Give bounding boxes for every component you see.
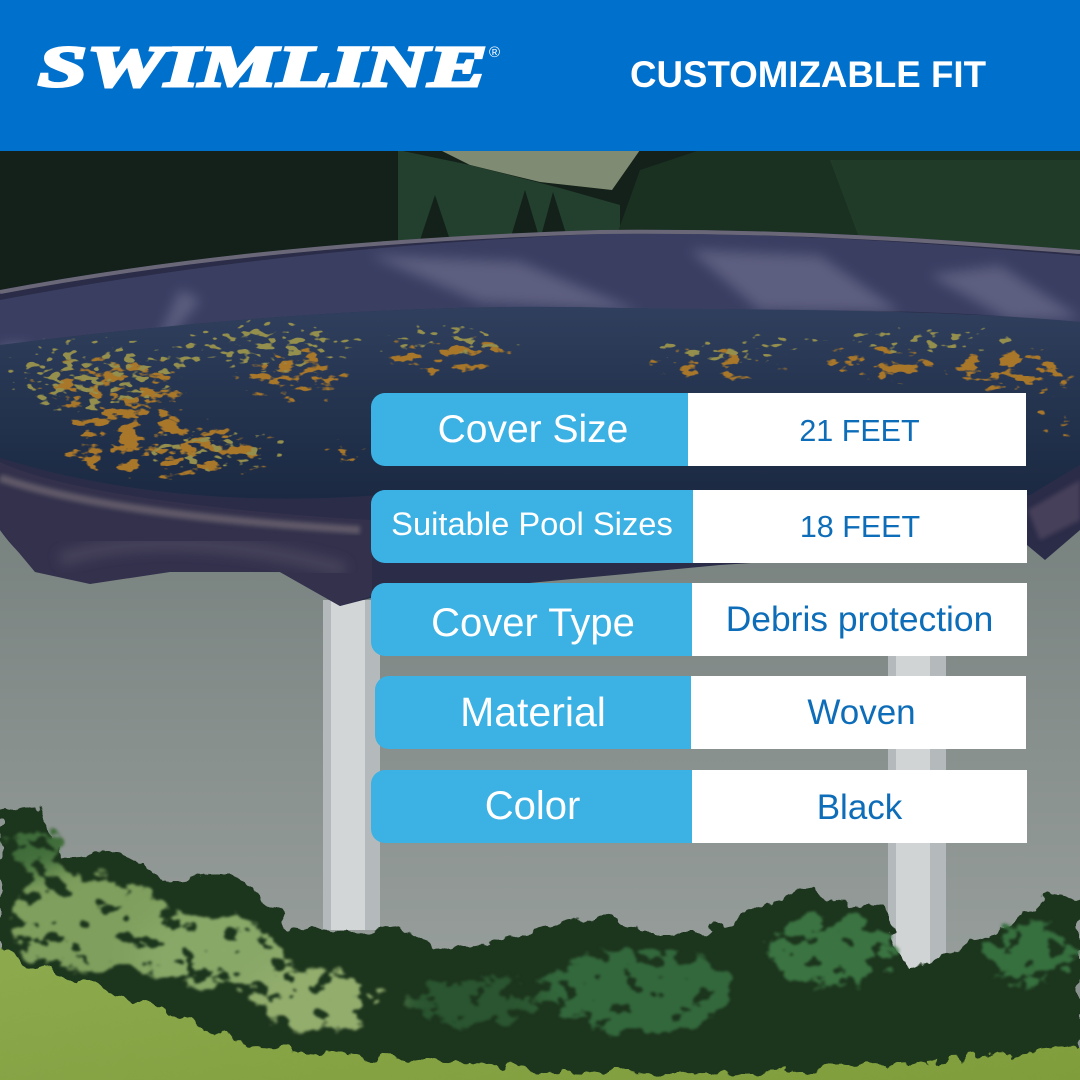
heading: CUSTOMIZABLE FIT [630, 54, 986, 95]
value [693, 490, 1027, 563]
spec row: cover size [371, 393, 1026, 466]
spec row: cover type [371, 583, 1027, 656]
value: Debris protection [726, 599, 993, 639]
spec row: material [375, 676, 1026, 749]
cover outer rim [0, 230, 1080, 606]
lawn [0, 945, 1080, 1080]
forest backdrop [0, 150, 1080, 320]
label: Cover Type [431, 600, 635, 644]
wall posts [323, 600, 946, 975]
cover water surface [0, 307, 1080, 499]
brand logo [37, 34, 500, 98]
value [688, 393, 1026, 466]
label: Color [485, 784, 580, 828]
foliage [0, 805, 1080, 1080]
label: Material [460, 689, 606, 735]
autumn leaves [0, 305, 1080, 492]
value: Black [817, 788, 902, 827]
label [371, 583, 692, 656]
label: Suitable Pool Sizes [391, 504, 673, 542]
label: Cover Size [438, 408, 628, 451]
label [375, 676, 691, 749]
value: Woven [807, 693, 916, 732]
label [371, 770, 692, 843]
label [371, 393, 688, 466]
cover inner slope [0, 234, 1080, 345]
pool wall [0, 530, 1080, 980]
brand logo: SWIMLINE [38, 34, 487, 98]
brand logo: ® [489, 44, 500, 61]
value [692, 770, 1027, 843]
label [371, 490, 693, 563]
spec row: color [371, 770, 1027, 843]
header band [0, 0, 1080, 151]
value [691, 676, 1026, 749]
value: 21 FEET [799, 414, 920, 448]
value [692, 583, 1027, 656]
value: 18 FEET [800, 510, 920, 544]
spec row: suitable pool sizes [371, 490, 1027, 563]
